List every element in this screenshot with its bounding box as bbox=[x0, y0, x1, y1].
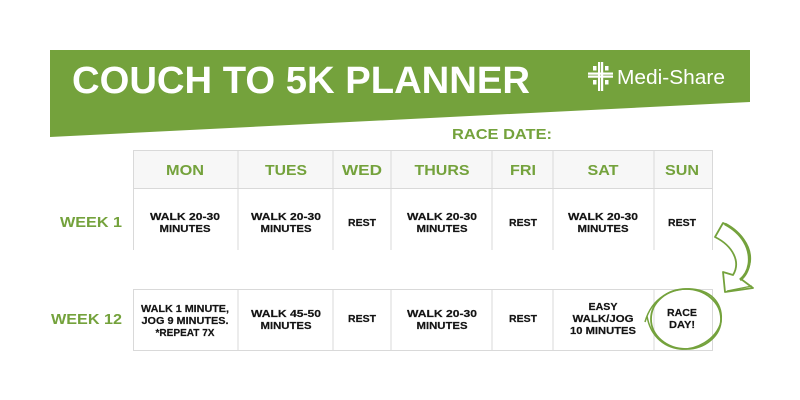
week 12 cells: REST bbox=[348, 314, 376, 325]
day headers: SAT bbox=[588, 162, 618, 179]
week 12 cells: WALK 45-50 bbox=[251, 309, 322, 320]
week 12 cells: REST bbox=[509, 314, 537, 325]
day headers: FRI bbox=[510, 162, 536, 179]
arrow: curved to race day bbox=[715, 223, 753, 292]
week 1 cells: MINUTES bbox=[578, 224, 629, 235]
day headers: THURS bbox=[414, 162, 470, 179]
week 1 cells: WALK 20-30 bbox=[407, 212, 478, 223]
week 12 cells: RACE bbox=[667, 308, 697, 319]
day headers: WED bbox=[342, 162, 382, 179]
day headers: MON bbox=[166, 162, 204, 179]
week 12 cells: EASY bbox=[588, 302, 618, 313]
week 12 cells: 10 MINUTES bbox=[570, 326, 636, 337]
week 1 cells: MINUTES bbox=[260, 224, 312, 235]
week 1 cells: WALK 20-30 bbox=[251, 212, 322, 223]
week 12 cells: WALK/JOG bbox=[572, 314, 634, 325]
table: week 1 bbox=[134, 150, 712, 250]
title: COUCH TO 5K PLANNER bbox=[72, 60, 530, 102]
week 1 cells: REST bbox=[668, 218, 696, 229]
week 1 label: WEEK 1 bbox=[60, 214, 122, 231]
table: week 12 bbox=[134, 289, 712, 350]
day headers bbox=[166, 162, 699, 179]
week 1 cells: WALK 20-30 bbox=[150, 212, 221, 223]
logo: Medi-Share bbox=[588, 62, 725, 91]
week 12 cells: WALK 20-30 bbox=[407, 309, 478, 320]
icon: cross logo bbox=[588, 62, 613, 91]
week 1 cells: REST bbox=[509, 218, 537, 229]
week 12 cells: MINUTES bbox=[260, 321, 312, 332]
week 12 cells: JOG 9 MINUTES. bbox=[142, 316, 229, 327]
race date label: RACE DATE: bbox=[452, 126, 552, 143]
week 1 cells: MINUTES bbox=[160, 224, 211, 235]
day headers: SUN bbox=[665, 162, 699, 179]
week 1 cells: MINUTES bbox=[416, 224, 468, 235]
week 12 cells: DAY! bbox=[669, 320, 695, 331]
circle around race day bbox=[645, 289, 721, 349]
logo wordmark: Medi-Share bbox=[617, 66, 725, 89]
week 1 cells: WALK 20-30 bbox=[568, 212, 639, 223]
banner bbox=[50, 50, 750, 137]
week 12 cells: WALK 1 MINUTE, bbox=[141, 304, 229, 315]
week 1 cells bbox=[150, 212, 696, 235]
day headers: TUES bbox=[265, 162, 307, 179]
week 12 cells: MINUTES bbox=[416, 321, 468, 332]
week 1 cells: REST bbox=[348, 218, 376, 229]
week 12 label: WEEK 12 bbox=[51, 311, 122, 328]
week 12 cells: *REPEAT 7X bbox=[156, 328, 215, 339]
week 12 cells bbox=[141, 302, 697, 339]
